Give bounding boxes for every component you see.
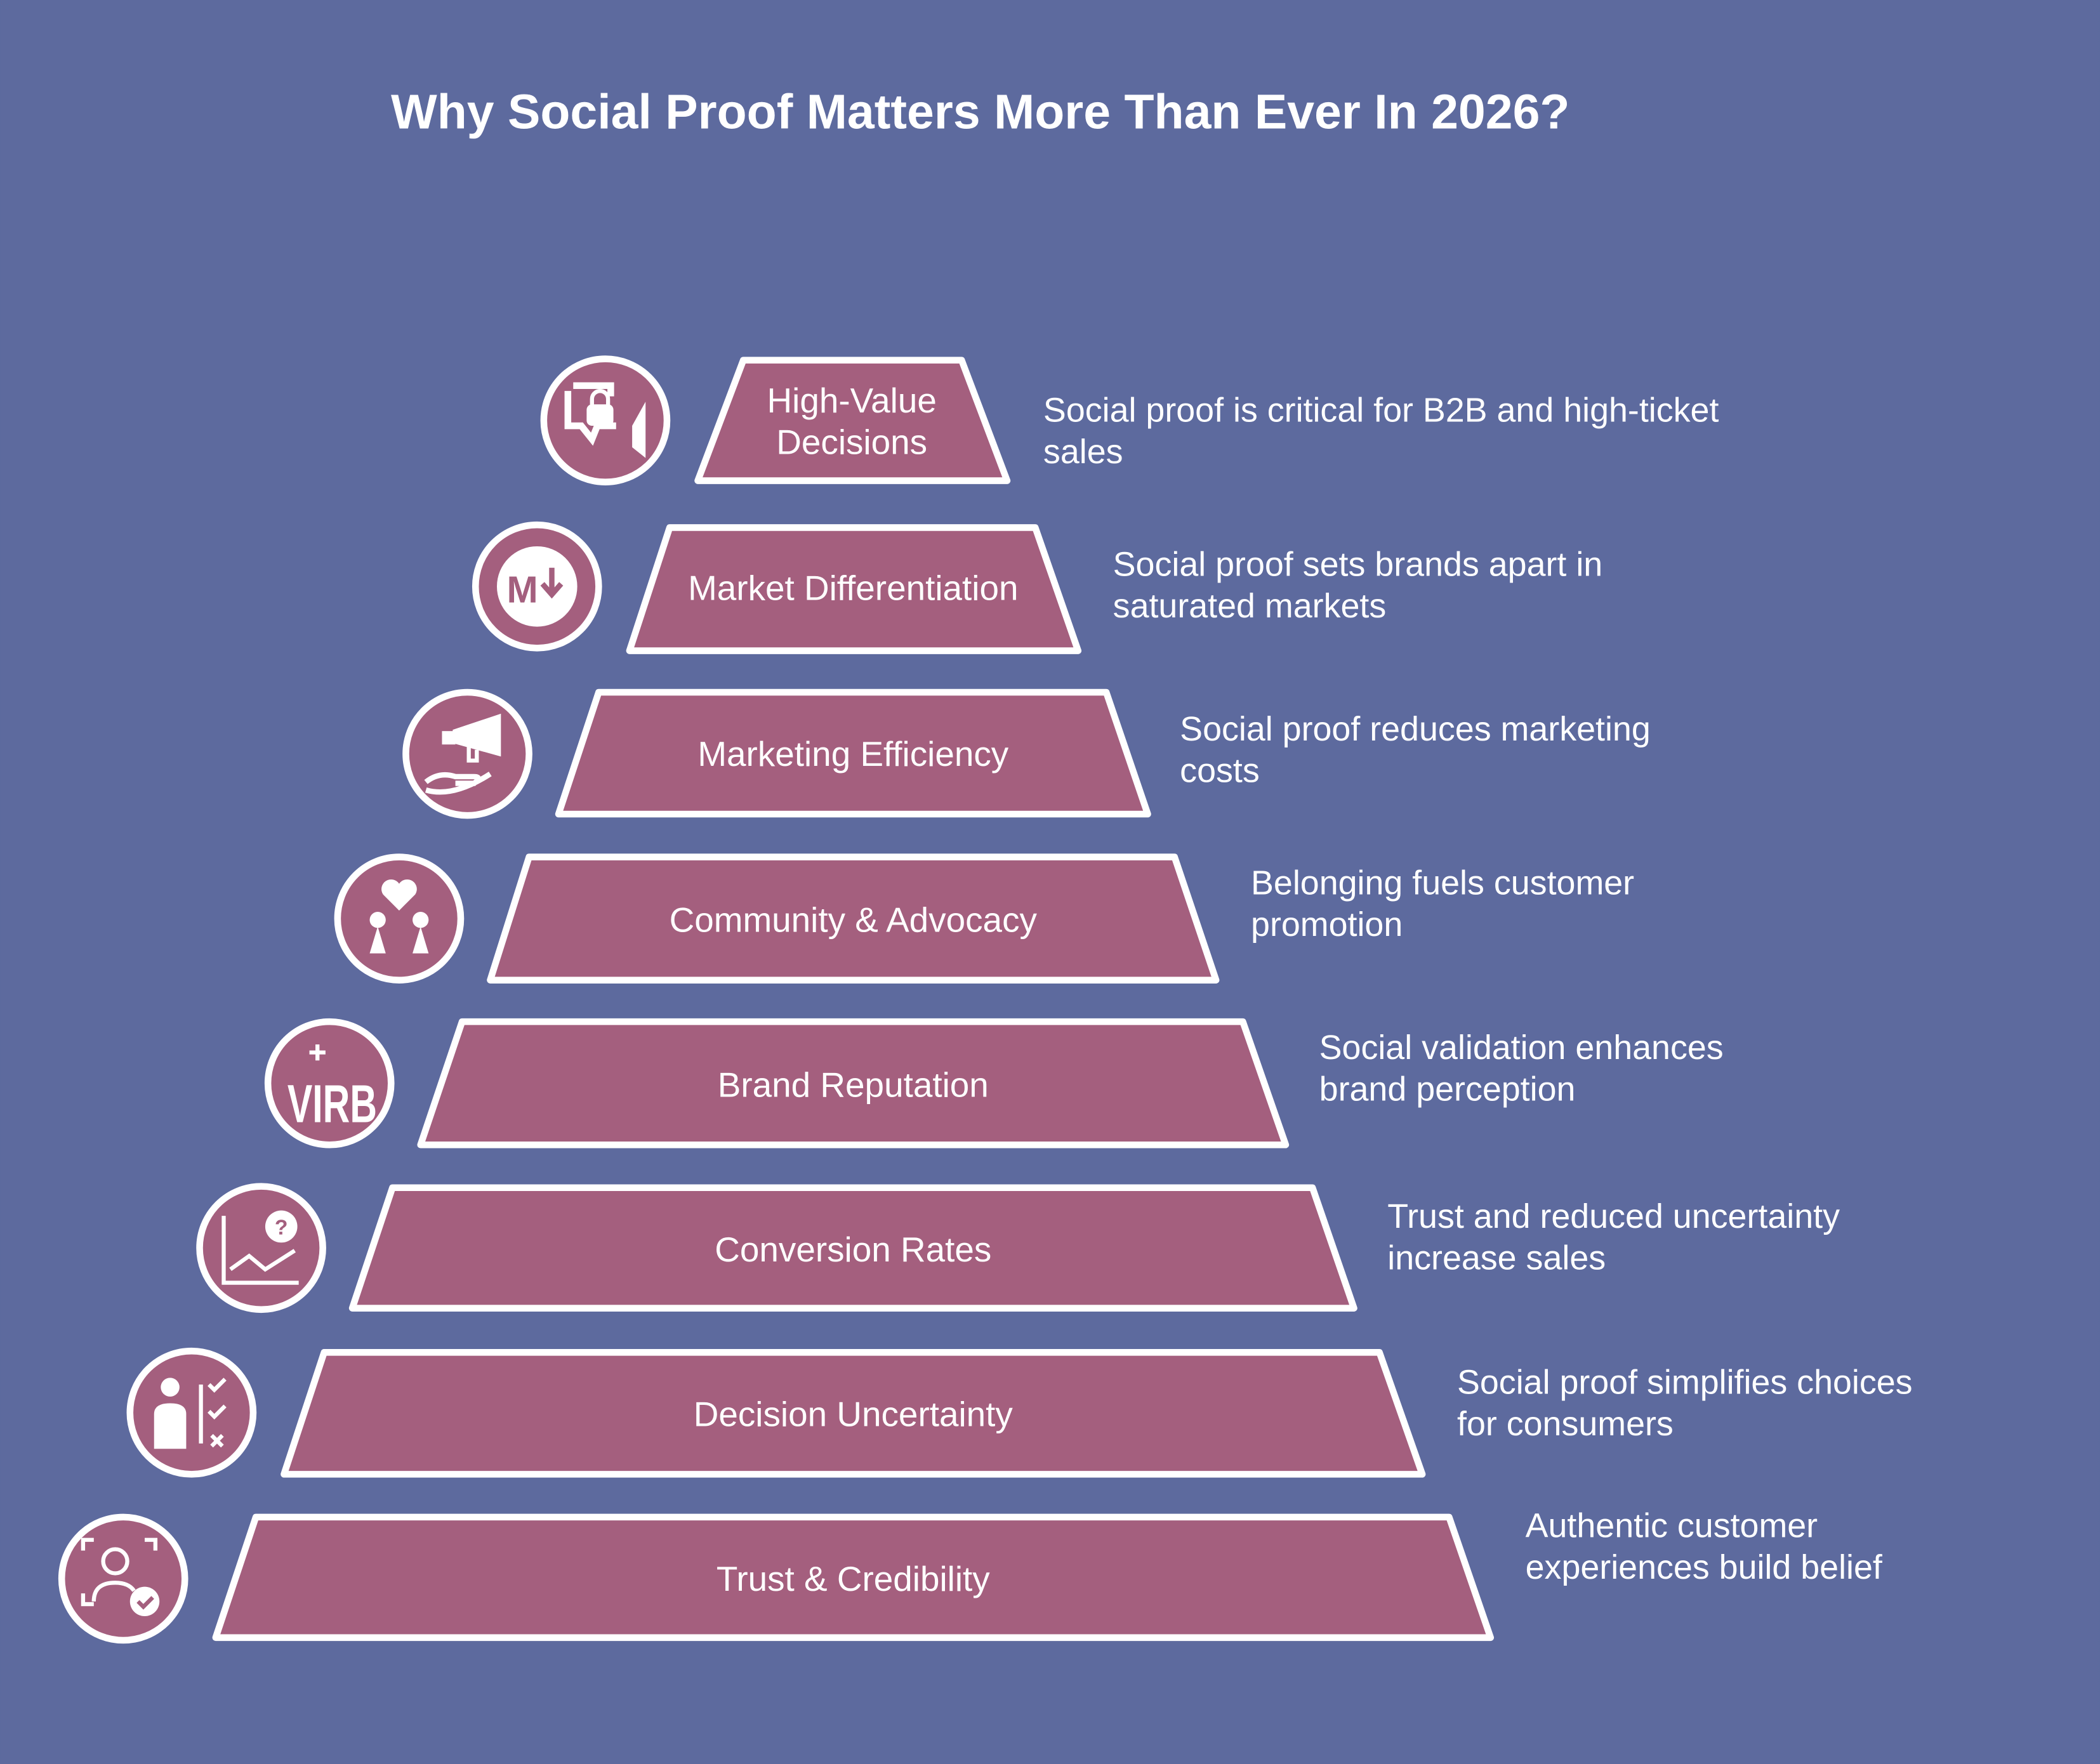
tier 1: High-Value Decisions: Decisions [776, 422, 927, 461]
label: Trust & Credibility [717, 1559, 990, 1598]
label: Brand Reputation [718, 1065, 989, 1104]
trapezoid [558, 692, 1148, 814]
label: Market Differentiation [688, 568, 1018, 607]
description: Authentic customer [1526, 1507, 1818, 1545]
label: Conversion Rates [715, 1230, 991, 1269]
icon: face check [62, 1517, 185, 1640]
icon: two people heart [338, 857, 461, 980]
tier 6: Conversion Rates [200, 1187, 1840, 1310]
trapezoid [352, 1188, 1354, 1308]
tier 2: Market Differentiation: saturated markets [1113, 587, 1386, 625]
icon: VIRB: VIRB [287, 1074, 377, 1134]
tier 3: Marketing Efficiency: costs [1180, 751, 1260, 789]
tier 1: High-Value Decisions [544, 359, 1719, 482]
label: High-Value [767, 381, 937, 420]
tier 8: Trust & Credibility [62, 1507, 1883, 1640]
icon: VIRB [268, 1022, 391, 1145]
description: Trust and reduced uncertainty [1387, 1197, 1840, 1235]
tier 4: Community & Advocacy [338, 857, 1634, 980]
description: Social proof simplifies choices [1457, 1364, 1913, 1402]
description: Social validation enhances [1319, 1029, 1724, 1067]
trapezoid [421, 1022, 1286, 1145]
description: Belonging fuels customer [1251, 864, 1634, 902]
trapezoid [490, 857, 1216, 980]
description: Social proof is critical for B2B and high-ticket [1043, 392, 1719, 430]
label: Community & Advocacy [670, 900, 1038, 940]
icon: markdown [475, 525, 598, 648]
tier 7: Decision Uncertainty [130, 1351, 1913, 1474]
icon: chart question: ? [275, 1216, 288, 1240]
trapezoid: High-Value Decisions [698, 360, 1007, 481]
tier 7: Decision Uncertainty: for consumers [1457, 1405, 1674, 1443]
trapezoid [630, 527, 1078, 651]
description: Social proof sets brands apart in [1113, 545, 1602, 583]
tier 1: High-Value Decisions: sales [1043, 433, 1123, 471]
tier 5: Brand Reputation: brand perception [1319, 1070, 1575, 1109]
tier 5: Brand Reputation [268, 1022, 1724, 1145]
icon: megaphone hand [406, 692, 529, 815]
icon: markdown: M [506, 569, 538, 611]
icon: person checklist [130, 1351, 253, 1474]
tier 3: Marketing Efficiency [406, 692, 1651, 815]
tier 4: Community & Advocacy: promotion [1251, 905, 1403, 944]
title: Why Social Proof Matters More Than Ever In 2026? [391, 85, 1569, 140]
tier 8: Trust & Credibility: experiences build belief [1526, 1548, 1883, 1586]
trapezoid [216, 1517, 1491, 1638]
label: Marketing Efficiency [697, 734, 1009, 773]
icon: lock speech bubble [544, 359, 667, 482]
tier 6: Conversion Rates: increase sales [1387, 1239, 1606, 1277]
label: Decision Uncertainty [694, 1394, 1013, 1433]
tier 2: Market Differentiation [475, 525, 1602, 651]
trapezoid [284, 1352, 1422, 1474]
icon: chart question [200, 1187, 323, 1310]
description: Social proof reduces marketing [1180, 710, 1651, 748]
